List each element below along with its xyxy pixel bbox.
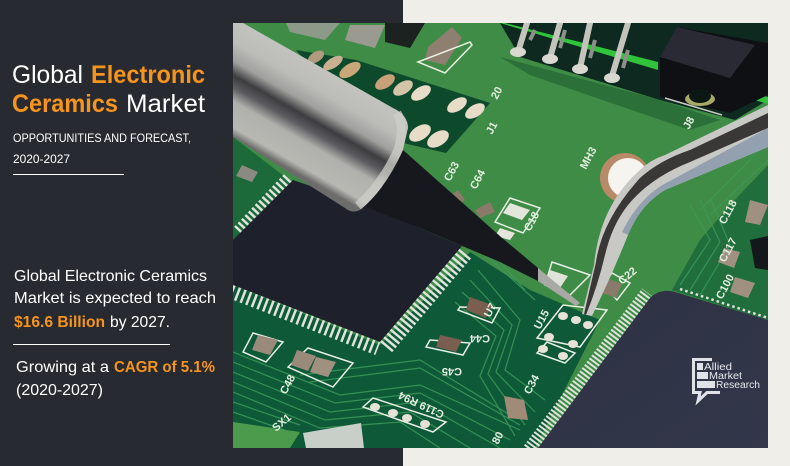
board silkscreen labels: C44 xyxy=(469,332,490,344)
board silkscreen labels: C63 xyxy=(442,160,462,183)
board silkscreen labels xyxy=(270,85,740,446)
soldering iron barrel end rim xyxy=(358,113,401,206)
pins of left chip xyxy=(231,179,466,348)
background: light right side xyxy=(403,0,790,466)
board silkscreen labels: C22 xyxy=(616,265,639,287)
growth rate statement: Growing at a xyxy=(16,359,109,376)
board silkscreen labels: U15 xyxy=(532,308,552,331)
soldering iron barrel xyxy=(233,23,408,212)
growth rate statement: (2020-2027) xyxy=(16,382,103,399)
board silkscreen labels: MH3 xyxy=(578,145,600,171)
board silkscreen labels: SX1 xyxy=(270,412,294,434)
Allied Market Research logo xyxy=(694,360,760,401)
small components xyxy=(236,165,768,448)
left chip xyxy=(233,180,462,342)
title: Market xyxy=(126,90,205,118)
soldering iron needle tip xyxy=(538,268,580,306)
Allied Market Research logo: Research xyxy=(716,380,760,391)
right chip xyxy=(538,291,768,448)
board silkscreen labels: C48 xyxy=(278,373,298,396)
board silkscreen labels: 80 xyxy=(490,430,506,446)
title: Global xyxy=(12,61,83,89)
board silkscreen labels: C64 xyxy=(468,167,489,191)
board silkscreen labels: C18 xyxy=(522,210,542,233)
Allied Market Research logo: Allied xyxy=(704,362,732,373)
market size statement xyxy=(14,268,216,331)
circuit traces xyxy=(233,150,768,448)
board silkscreen labels: C117 xyxy=(717,236,740,264)
Allied Market Research logo: Market xyxy=(709,371,742,382)
photo: circuit board with soldering tools xyxy=(231,23,768,450)
background: dark left side xyxy=(0,0,403,466)
subtitle: 2020-2027 xyxy=(13,152,70,166)
board silkscreen labels: J8 xyxy=(681,115,697,131)
subtitle: OPPORTUNITIES AND FORECAST, xyxy=(13,131,191,145)
subtitle xyxy=(13,131,191,166)
board silkscreen labels: C119 R94 xyxy=(396,388,446,420)
top components xyxy=(286,23,472,73)
board silkscreen labels: C100 xyxy=(714,273,737,301)
board silkscreen labels: 20 xyxy=(489,85,505,101)
dark trace zone xyxy=(233,57,768,448)
connector and header pins xyxy=(500,23,768,120)
title xyxy=(12,61,205,118)
soldering iron cone xyxy=(350,150,538,281)
market size statement: Global Electronic Ceramics xyxy=(14,268,207,285)
pad strip xyxy=(296,48,490,153)
market size statement: $16.6 Billion xyxy=(14,314,105,331)
board base xyxy=(233,23,768,448)
tweezers xyxy=(582,105,768,316)
growth rate statement: CAGR of 5.1% xyxy=(114,359,215,376)
board silkscreen labels: J1 xyxy=(484,120,500,136)
board silkscreen labels: C45 xyxy=(442,365,462,377)
market size statement: by 2027. xyxy=(110,314,170,331)
growth rate statement xyxy=(16,359,215,399)
board silkscreen labels: U7 xyxy=(482,301,499,319)
pins of right chip xyxy=(530,289,768,450)
market size statement: Market is expected to reach xyxy=(14,290,216,307)
board silkscreen labels: C118 xyxy=(717,198,740,226)
board silkscreen labels: C34 xyxy=(522,372,543,396)
title: Ceramics xyxy=(12,90,118,118)
mounting hole MH3 xyxy=(600,153,646,200)
title: Electronic xyxy=(91,61,205,89)
